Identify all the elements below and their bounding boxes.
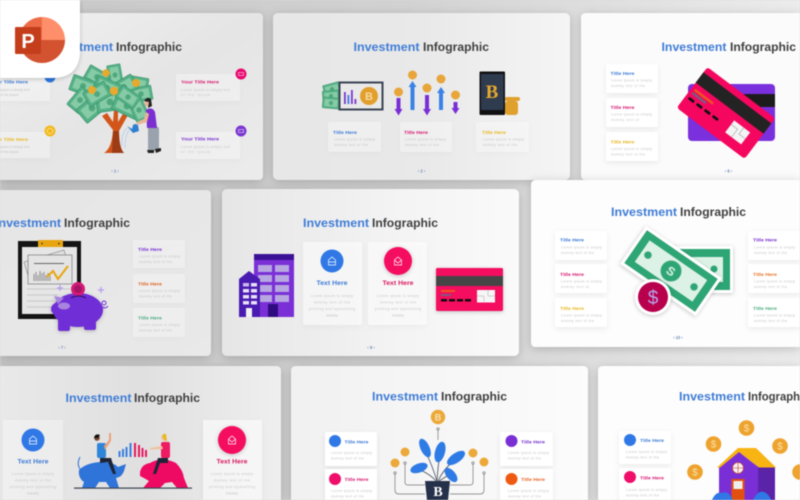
card: blue: Lorem Ipsum is simply — [626, 450, 667, 454]
card: green: Lorem Ipsum is simply — [139, 323, 180, 327]
slide 6 title: Investment — [611, 206, 677, 219]
card: right green: dummy text of the — [754, 319, 787, 323]
slide 4 title: Infographic — [64, 217, 131, 230]
icon: dollar bills and coin — [620, 226, 733, 316]
card: bottom right: Your Title Here — [181, 136, 219, 142]
card: orange — [500, 469, 553, 500]
slide 8 title — [372, 390, 508, 404]
card: text here blue: Lorem Ipsum is simply — [311, 294, 353, 298]
slide 5 background — [222, 189, 519, 356]
card: text here blue: dummy text of the — [314, 300, 350, 304]
icon: house — [712, 448, 776, 500]
card: left blue: Lorem Ipsum is simply — [561, 246, 602, 250]
card: orange: Title Here — [521, 477, 545, 483]
slide 3 title — [662, 41, 797, 54]
icon: phone with bitcoin and coins: B — [486, 82, 499, 103]
card: left pink: Lorem Ipsum is simply — [561, 280, 602, 284]
card: pink: dummy text of the — [405, 143, 439, 147]
card: pink — [619, 468, 671, 500]
slide 1 background — [0, 13, 263, 180]
card: left pink: Title Here — [560, 272, 584, 278]
slide 7 title — [66, 392, 201, 405]
card: yellow: Lorem Ipsum is simply — [483, 138, 524, 142]
icon: phone with bitcoin and coins — [480, 72, 520, 115]
icon: dollar bills and coin: S — [663, 263, 678, 279]
panel: slide 9 building and card — [222, 189, 519, 356]
card: top right — [176, 68, 246, 101]
pager: ‹ 9 › — [367, 345, 375, 350]
panel: slide bull and bear — [0, 366, 281, 500]
card: right purple: Lorem Ipsum is simply — [754, 246, 795, 250]
icon: dollar coins: $ — [744, 424, 750, 434]
card: bottom left: r Title Here — [0, 137, 28, 143]
panel: slide house — [598, 366, 800, 500]
icon: person watering — [122, 98, 161, 153]
slide 3 background — [581, 13, 800, 180]
card: yellow — [606, 132, 658, 161]
card: pink: Lorem Ipsum is simply — [611, 112, 652, 116]
card: purple: Title Here — [521, 440, 545, 446]
icon: credit cards — [677, 67, 775, 159]
icon: plant in pot — [409, 437, 467, 500]
pager: ‹ 6 › — [725, 168, 733, 174]
slide 2 title — [354, 41, 490, 54]
pager: ‹ 2 › — [418, 168, 426, 174]
card: text here blue: industry — [326, 314, 338, 318]
card: pink — [606, 98, 658, 127]
card: pink: Lorem Ipsum is simply — [626, 488, 667, 492]
card: text here pink: printing and typesetting — [375, 307, 421, 311]
slide 9 background — [598, 366, 800, 500]
card: purple: dummy text of the — [139, 260, 172, 264]
card: right orange — [748, 264, 800, 293]
card: blue: dummy text of the — [611, 84, 645, 88]
card: top left: of the ipsum — [0, 93, 19, 97]
card: top right: Lorem Ipsum is simply text — [181, 88, 230, 92]
slide 6 title — [611, 206, 747, 219]
card: left yellow: Title Here — [560, 306, 584, 312]
card: right green: Title Here — [753, 306, 777, 312]
card: bottom left: of the ipsum — [0, 150, 19, 154]
icon: clipboard — [18, 240, 81, 319]
card: text here pink: industry — [392, 314, 404, 318]
card: text here pink: Lorem Ipsum is simply — [211, 472, 253, 476]
slide 2 title: Infographic — [423, 41, 490, 54]
icon: PowerPoint mark: P — [21, 31, 35, 53]
card: orange: Title Here — [138, 282, 162, 288]
card: left blue: Title Here — [560, 238, 584, 244]
panel: slide 4 piggy bank — [0, 190, 211, 356]
card: right green — [748, 298, 800, 327]
slide 8 background — [291, 366, 588, 500]
card: blue: dummy text of the — [626, 456, 659, 460]
icon: plant in pot: B — [433, 485, 443, 500]
slide 3 title: Investment — [662, 41, 727, 54]
card: text here blue: Lorem Ipsum is simply — [12, 472, 54, 476]
card: yellow — [476, 122, 529, 152]
card: pink: Title Here — [640, 476, 664, 482]
pager: ‹ 7 › — [58, 345, 66, 350]
icon: monitor with chart — [340, 82, 382, 110]
card: left yellow: dummy text of the — [561, 319, 594, 323]
card: left pink — [555, 264, 607, 293]
card: top right: Your Title Here — [181, 80, 219, 86]
slide 7 title: Investment — [66, 392, 132, 405]
card: blue: Title Here — [333, 130, 357, 136]
card: text here pink: dummy text of the — [380, 300, 416, 304]
card: text here pink — [368, 242, 427, 325]
card: purple: Lorem Ipsum is simply — [139, 254, 180, 258]
slide 6 background — [531, 180, 800, 347]
panel: slide 2 bitcoin — [273, 13, 570, 180]
card: top left: Ipsum is simply text — [0, 88, 30, 92]
card: blue: Lorem Ipsum is simply — [331, 451, 372, 455]
icon: dollar coins: $ — [711, 440, 717, 450]
card: text here blue: printing and typesetting — [309, 307, 355, 311]
card: left yellow: Lorem Ipsum is simply — [561, 314, 602, 318]
slide 4 background — [0, 190, 211, 356]
card: orange: Lorem Ipsum is simply — [508, 489, 549, 493]
card: right green: Lorem Ipsum is simply — [754, 314, 795, 318]
icon: purple building — [239, 254, 294, 317]
slide 7 background — [0, 366, 281, 500]
card: text here pink: dummy text of the — [214, 478, 250, 482]
card: bottom left: Ipsum is simply text — [0, 145, 30, 149]
card: purple — [500, 432, 553, 466]
card: blue: dummy text of the — [331, 456, 364, 460]
panel: slide 10 dollar bills — [531, 180, 800, 347]
card: top left — [0, 72, 56, 101]
card: right orange: dummy text of the — [754, 285, 787, 289]
card: pink: Lorem Ipsum is simply — [331, 489, 372, 493]
card: text here pink: Text Here — [382, 280, 414, 287]
icon: bear with rider — [140, 434, 188, 488]
card: yellow: Title Here — [482, 130, 506, 136]
card: bottom right: Lorem Ipsum is simply text — [181, 145, 230, 149]
icon: coins: B — [435, 412, 442, 422]
icon: coins — [390, 410, 488, 468]
slide 8 title: Infographic — [441, 390, 508, 404]
card: text here pink: Lorem Ipsum is simply — [377, 294, 419, 298]
card: green: Title Here — [138, 316, 162, 322]
card: pink: dummy text of the — [626, 494, 659, 498]
connector lines — [394, 428, 485, 494]
icon: bull with rider — [78, 433, 126, 488]
slide 2 title: Investment — [354, 41, 420, 54]
card: right orange: Lorem Ipsum is simply — [754, 280, 795, 284]
card: left yellow — [555, 298, 607, 327]
pager: ‹ 1 › — [111, 168, 119, 174]
icon: piggy bank — [51, 282, 108, 331]
slide 9 title: Investment — [679, 390, 745, 404]
card: right purple: Title Here — [753, 238, 777, 244]
slide 6 title: Infographic — [680, 206, 747, 219]
ground line — [74, 488, 192, 489]
card: blue: Lorem Ipsum is simply — [334, 138, 375, 142]
panel: slide plant — [291, 366, 588, 500]
card: left pink: dummy text of — [561, 285, 589, 289]
card: text here pink — [203, 420, 262, 500]
slide 2 background — [273, 13, 570, 180]
card: yellow: dummy text of the — [611, 152, 645, 156]
card: text here blue: industry — [27, 492, 39, 496]
card: top left: r Title Here — [0, 80, 28, 86]
icon: cash stack — [322, 81, 342, 109]
card: pink: Title Here — [610, 105, 635, 111]
card: blue: Title Here — [640, 438, 664, 444]
slide 1 title: Infographic — [116, 41, 183, 54]
card: pink — [325, 469, 377, 500]
card: left blue: dummy text of the — [561, 251, 594, 255]
slide 1 title: Investment — [47, 41, 113, 54]
card: pink: Title Here — [404, 130, 428, 136]
card: top right: of the ipsum — [181, 93, 210, 97]
card: yellow: Lorem Ipsum is simply — [611, 147, 652, 151]
card: orange: dummy text of the — [139, 294, 172, 298]
card: orange — [133, 274, 185, 303]
card: right purple — [748, 231, 800, 260]
card: purple: Lorem Ipsum is simply — [508, 451, 549, 455]
card: orange: dummy text of the — [508, 494, 541, 498]
card: bottom right — [176, 126, 246, 159]
slide 8 title: Investment — [372, 390, 438, 404]
chart: bars between riders — [118, 443, 147, 457]
card: left blue — [555, 231, 607, 260]
card: text here pink: printing and typesetting — [209, 485, 255, 489]
card: text here blue — [303, 242, 362, 325]
panel: slide 1 money tree — [0, 13, 263, 180]
icon: dollar bills and coin: $ — [648, 288, 659, 309]
card: text here blue — [3, 420, 63, 500]
card: text here blue: dummy text of the — [15, 478, 51, 482]
card: bottom left — [0, 126, 56, 158]
pager: ‹ 10 › — [673, 335, 683, 340]
card: blue — [619, 431, 671, 464]
card: blue: Title Here — [610, 71, 635, 77]
card: pink: dummy text of the — [331, 494, 364, 498]
card: right orange: Title Here — [753, 272, 777, 278]
card: blue: Title Here — [344, 440, 369, 446]
slide 5 title — [303, 217, 439, 230]
icon: monitor with chart: B — [365, 91, 373, 103]
icon: dollar coins — [687, 420, 800, 480]
card: blue — [606, 64, 658, 93]
panel: slide 3 credit cards — [581, 13, 800, 180]
slide 1 title — [47, 41, 183, 54]
card: text here blue: Text Here — [18, 458, 49, 466]
card: purple — [133, 240, 185, 268]
slide 4 title — [0, 217, 131, 230]
card: text here pink: Text Here — [216, 458, 248, 466]
card: right purple: dummy text of the — [754, 251, 787, 255]
card: purple: Title Here — [138, 247, 162, 253]
card: blue — [325, 432, 377, 466]
card: orange: Lorem Ipsum is simply — [139, 289, 180, 293]
card: blue: dummy text of the — [334, 143, 368, 147]
card: blue — [328, 122, 381, 152]
icon: dollar coins: $ — [777, 442, 783, 452]
card: text here blue: printing and typesetting — [10, 485, 56, 489]
card: yellow: Title Here — [610, 140, 635, 146]
card: purple: dummy text of the — [508, 456, 541, 460]
card: bottom right: of the ipsum — [181, 150, 210, 154]
icon: money tree — [67, 64, 153, 153]
slide 3 title: Infographic — [730, 41, 797, 54]
slide 5 title: Investment — [303, 217, 369, 230]
card: text here pink: industry — [226, 492, 238, 496]
card: pink: Lorem Ipsum is simply — [405, 138, 446, 142]
card: yellow: dummy text of the — [483, 143, 517, 147]
logo: PowerPoint badge — [0, 0, 80, 78]
slide 9 title — [679, 390, 800, 404]
card: text here blue: Text Here — [316, 280, 348, 287]
icon: dollar coins: $ — [692, 468, 698, 478]
slide 9 title: Infograph — [748, 390, 800, 404]
logo white backing — [0, 0, 80, 78]
card: green — [133, 308, 185, 337]
card: green: dummy text of the — [139, 328, 172, 332]
card: pink — [400, 122, 452, 152]
chart: up and down arrows — [394, 70, 460, 116]
card: pink: dummy text of — [611, 118, 639, 122]
slide 7 title: Infographic — [134, 392, 201, 405]
icon: credit card — [436, 268, 503, 311]
card: pink: Title Here — [344, 477, 369, 483]
card: blue: Lorem Ipsum is simply — [611, 78, 652, 82]
slide 5 title: Infographic — [372, 217, 439, 230]
